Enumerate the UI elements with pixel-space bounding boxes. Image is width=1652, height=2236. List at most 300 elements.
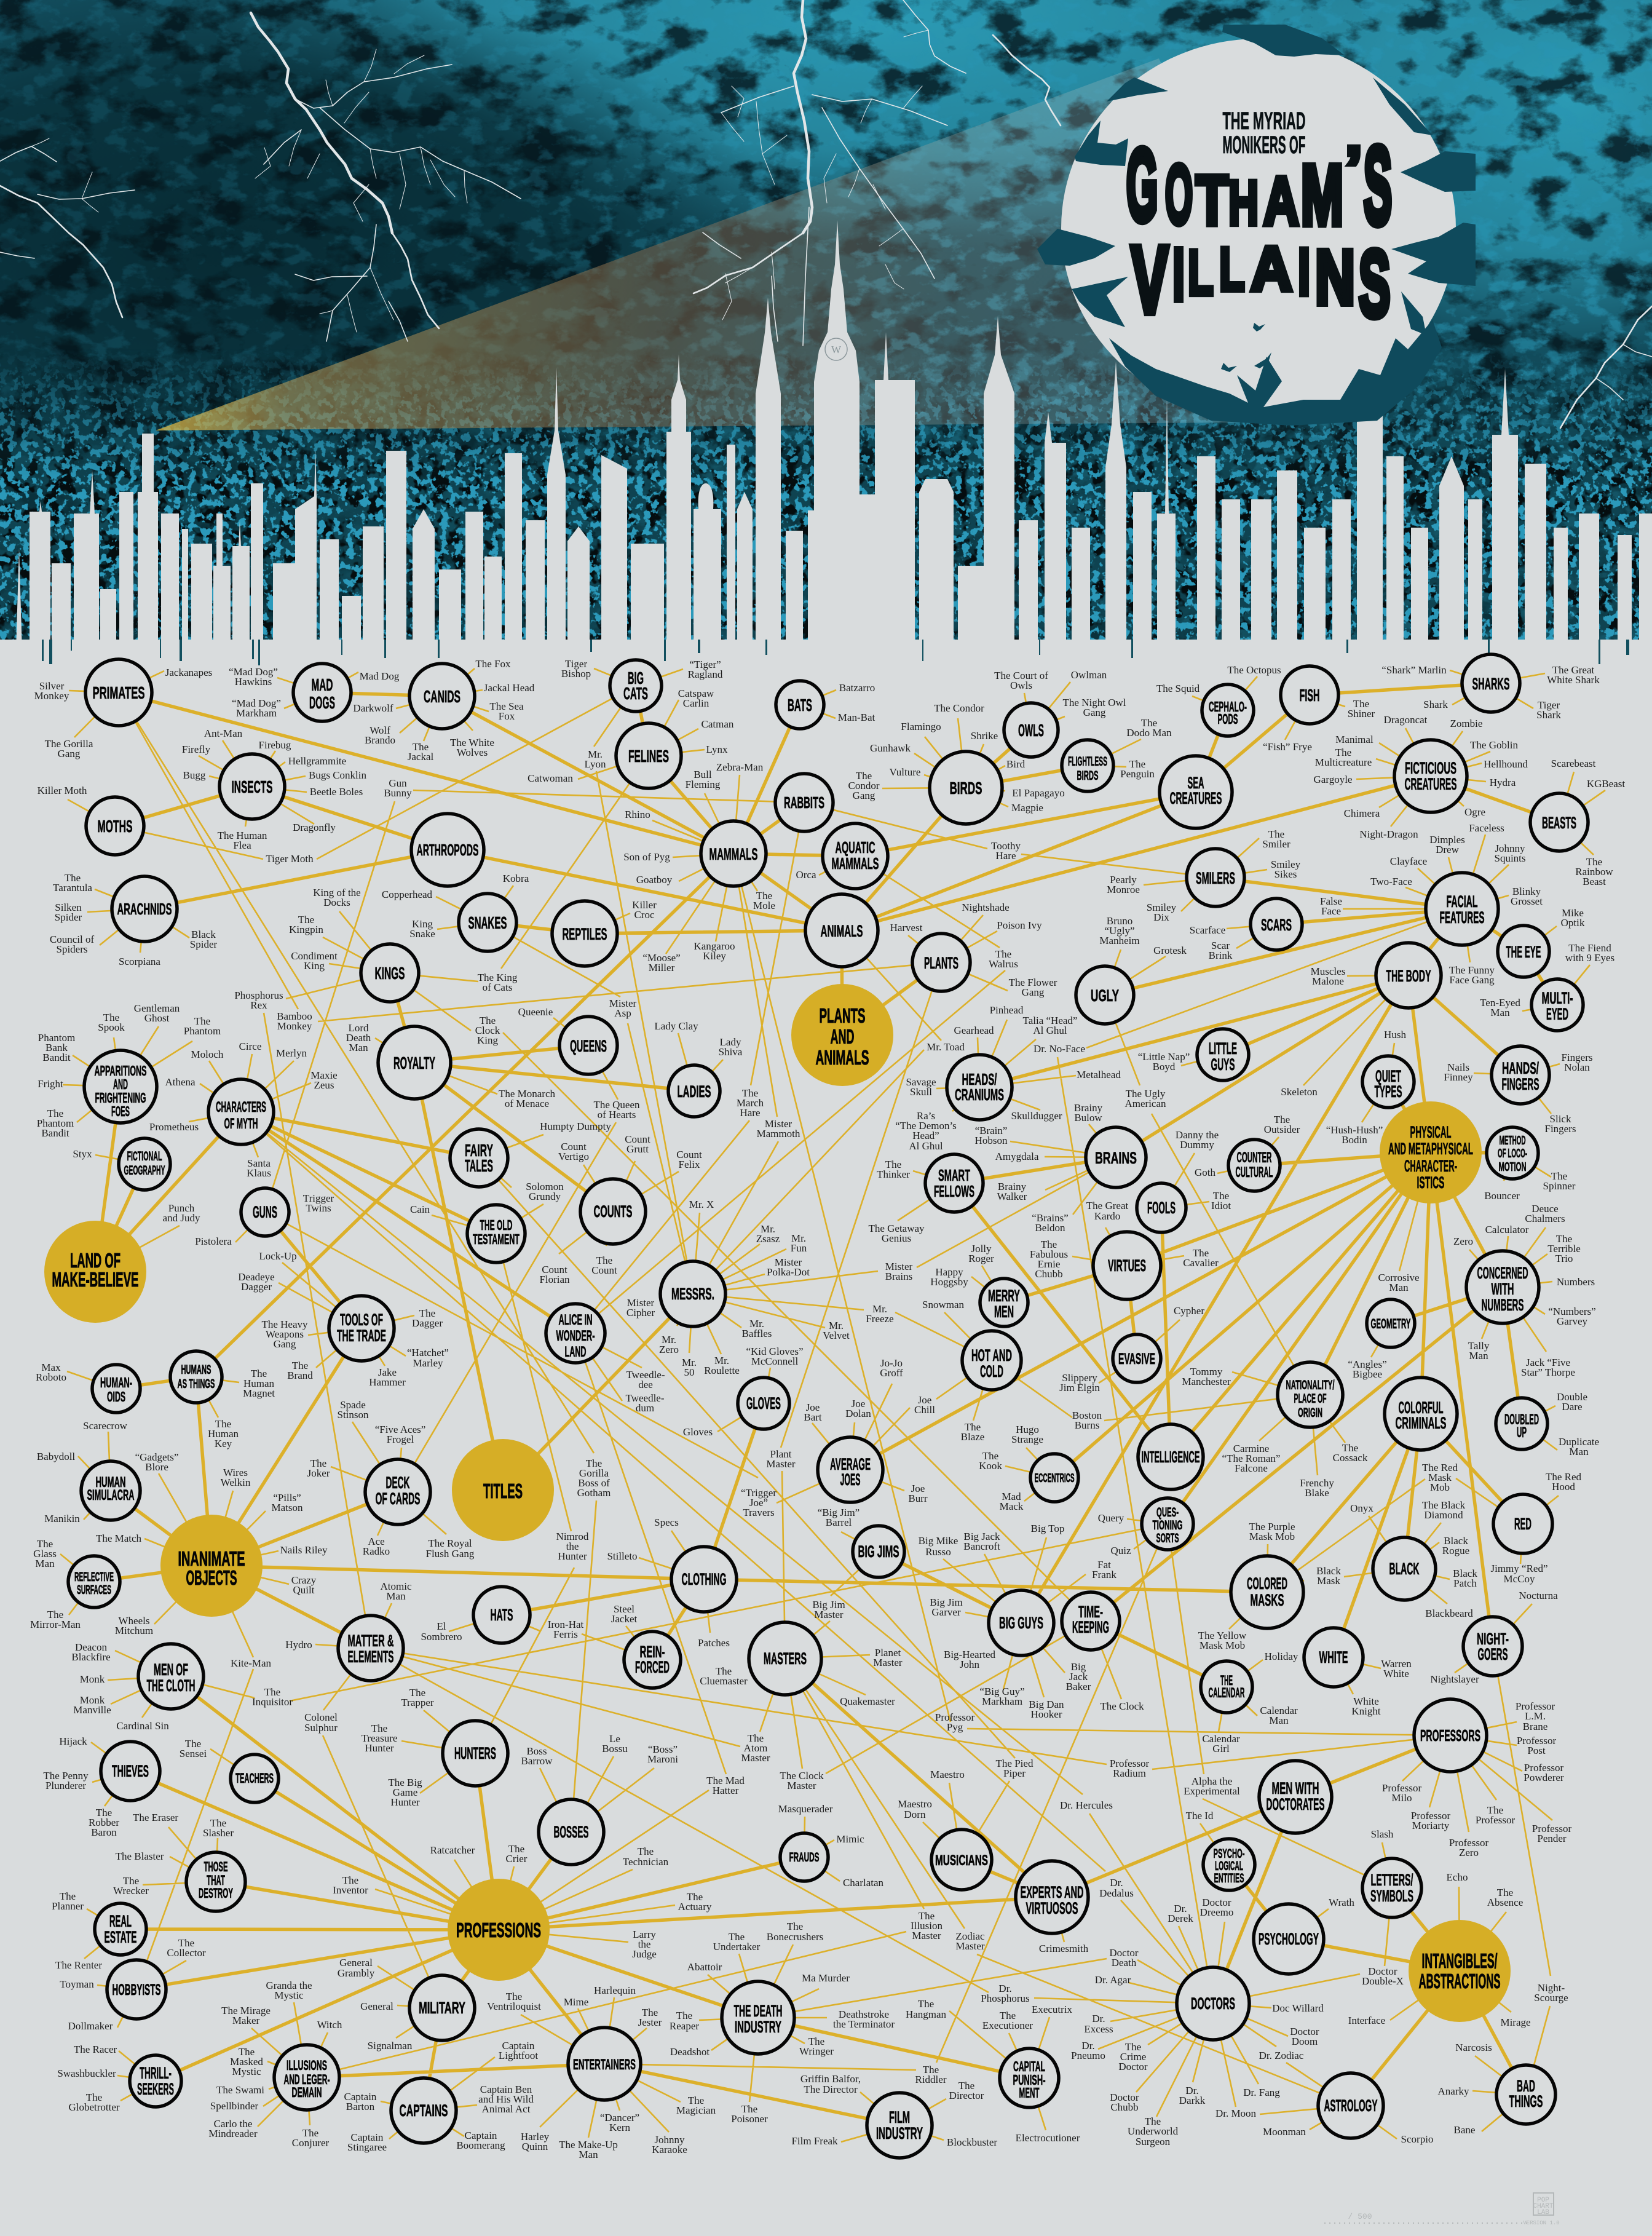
- node: Captains: Captain Ben: [480, 2083, 532, 2095]
- node: Professors: Professor: [1532, 1823, 1571, 1834]
- node: Messrs.: Zero: [659, 1344, 679, 1355]
- hub: Professions: Inventor: [333, 1884, 368, 1896]
- node: Mammals: Rhino: [625, 809, 650, 820]
- node: Professors: PROFESSORS: [1420, 1726, 1480, 1745]
- node: Professors: Radium: [1113, 1767, 1146, 1779]
- node: Humans as Things: Key: [215, 1438, 232, 1449]
- node: Primates: Silver: [39, 680, 64, 692]
- node: Nationality / Place of Origin: “The Roman”: [1222, 1453, 1280, 1464]
- node: Doctors: [981, 1799, 1404, 2147]
- node: Kings: Monkey: [277, 1020, 312, 1032]
- node: Doctors: Chubb: [1110, 2101, 1139, 2113]
- hub: Professions: Judge: [632, 1948, 657, 1960]
- node: Real Estate: Planner: [52, 1900, 84, 1912]
- node: Average Joes: Travers: [743, 1507, 775, 1518]
- poster title: V: [1131, 227, 1168, 333]
- node: Messrs.: Mr.: [714, 1355, 729, 1366]
- node: Insects: Bugs Conklin: [309, 769, 366, 781]
- node: Thrill-Seekers: The Racer: [74, 2044, 117, 2055]
- node: The Eye: Mike: [1562, 907, 1584, 919]
- node: Kings: KINGS: [375, 964, 405, 983]
- node: Heads / Craniums: HEADS/: [962, 1070, 997, 1088]
- node: Tools of the Trade: Lock-Up: [259, 1250, 297, 1262]
- node: Doctors: Doctor: [1368, 1965, 1397, 1977]
- node: Hats: Ferris: [553, 1628, 578, 1640]
- node: Hobbyists: [60, 1937, 206, 2032]
- node: Hot and Cold: HOT AND: [971, 1346, 1012, 1365]
- node: Felines: Lynx: [706, 743, 728, 755]
- node: Bosses: BOSSES: [553, 1823, 589, 1841]
- hub: Inanimate Objects: Nails Riley: [280, 1544, 328, 1556]
- node: Rabbits: Toothy: [991, 840, 1021, 852]
- node: Canids: Wolf: [370, 724, 390, 736]
- hub: Inanimate Objects: OBJECTS: [186, 1566, 237, 1589]
- node: Masters: Master: [873, 1657, 903, 1668]
- node: Geometry: “Angles”: [1348, 1358, 1387, 1370]
- node: Ficticious Creatures: The: [1335, 747, 1351, 758]
- node: Messrs.: Mr.: [662, 1334, 676, 1346]
- node: Men of the Cloth: Inquisitor: [252, 1696, 293, 1708]
- node: Messrs.: Baffles: [742, 1328, 772, 1339]
- node: Fish: [1263, 666, 1375, 753]
- node: Doctors: Dr.: [1174, 1903, 1187, 1914]
- node: The Death Industry: The: [787, 1921, 803, 1932]
- node: Characters of Myth: Merlyn: [276, 1047, 307, 1059]
- node: Entertainers: Harlequin: [594, 1984, 636, 1996]
- city skyline: W: [831, 344, 842, 355]
- node: Fictional Geography: Styx: [73, 1148, 92, 1160]
- node: Masters: Quakemaster: [840, 1695, 895, 1707]
- node: Illusions and Legerdemain: Witch: [317, 2019, 342, 2031]
- node: Film Industry: The: [958, 2080, 974, 2091]
- node: Birds: Shrike: [971, 730, 998, 742]
- hub: Physical and Metaphysical Characteristics: ISTICS: [1417, 1173, 1445, 1192]
- node: The Calendar: Man: [1269, 1715, 1289, 1726]
- node: Geometry: GEOMETRY: [1371, 1316, 1411, 1331]
- node: Big Guys: Big-Hearted: [944, 1649, 995, 1660]
- node: Mammals: Bull: [694, 769, 712, 780]
- spotlight beam: [156, 58, 1322, 430]
- node: Method of Locomotion: MOTION: [1499, 1160, 1526, 1174]
- node: Reptiles: Killer: [632, 899, 657, 911]
- node: Characters of Myth: Athena: [165, 1076, 196, 1088]
- node: Illusions and Legerdemain: Spellbinder: [210, 2100, 259, 2112]
- node: Those That Destroy: Wrecker: [113, 1885, 149, 1897]
- node: Virtues: Fabulous: [1030, 1248, 1068, 1260]
- node: Fools: The: [1213, 1190, 1229, 1202]
- node: Concerned with Numbers: Zero: [1453, 1235, 1473, 1247]
- node: Reinforced: [611, 1603, 681, 1688]
- node: Facial Features: Face Gang: [1449, 974, 1495, 986]
- node: Bats: Man-Bat: [838, 712, 875, 723]
- node: Entertainers: Man: [579, 2149, 598, 2160]
- node: The Death Industry: The: [729, 1931, 745, 1943]
- node: Beasts: Rainbow: [1575, 866, 1613, 878]
- node: Kings: Phosphorus: [234, 989, 283, 1001]
- node: Brains: [885, 1102, 1146, 1282]
- node: Heads / Craniums: Head”: [912, 1130, 939, 1141]
- node: Black: Onyx: [1350, 1502, 1373, 1514]
- node: Royalty: Queenie: [518, 1006, 553, 1018]
- node: Rabbits: Hare: [995, 850, 1016, 862]
- node: Big Cats: [561, 658, 723, 770]
- node: Concerned with Numbers: Numbers: [1557, 1276, 1595, 1288]
- node: Doctors: Dr.: [1092, 2013, 1105, 2024]
- node: Reptiles: Croc: [634, 909, 655, 921]
- node: Snakes: Mister: [609, 997, 636, 1009]
- node: Men of the Cloth: The: [264, 1686, 280, 1698]
- node: Mad Dogs: Markham: [236, 707, 277, 719]
- node: Big Guys: Fat: [1097, 1559, 1111, 1571]
- node: Ficticious Creatures: [1314, 714, 1528, 840]
- node: Black: The Black: [1422, 1499, 1465, 1511]
- node: Kings: Kingpin: [289, 924, 323, 935]
- node: Captains: Captain: [344, 2091, 376, 2103]
- node: Ficticious Creatures: Hellhound: [1484, 758, 1528, 770]
- node: Ficticious Creatures: The Goblin: [1470, 739, 1518, 751]
- node: Questioning Sorts: SORTS: [1156, 1531, 1179, 1545]
- node: Thrill-Seekers: The: [86, 2091, 102, 2103]
- node: Messrs.: Freeze: [866, 1313, 894, 1325]
- hub: Physical and Metaphysical Characteristics: CHARACTER-: [1404, 1157, 1457, 1175]
- hub: Professions: PROFESSIONS: [456, 1919, 541, 1941]
- node: Smilers: Dix: [1153, 911, 1169, 923]
- node: Brains: Amygdala: [995, 1151, 1039, 1162]
- node: Captains: Barton: [346, 2101, 375, 2112]
- node: Fools: Dummy: [1180, 1139, 1214, 1151]
- hub: Plants and Animals: PLANTS: [819, 1004, 866, 1027]
- node: Deck of Cards: Flush Gang: [426, 1548, 475, 1560]
- node: Snakes: [382, 873, 637, 1019]
- node: Experts and Virtuosos: [1016, 1861, 1089, 1954]
- node: Capital Punishment: Executrix: [1032, 2004, 1073, 2015]
- node: Mammals: MAMMALS: [709, 845, 757, 863]
- node: Doctors: Doctor: [1202, 1897, 1231, 1908]
- node: Captains: Stingaree: [347, 2141, 387, 2153]
- node: Doctors: Dr. Hercules: [1060, 1799, 1113, 1811]
- hub: Intangibles / Abstractions: Echo: [1447, 1871, 1468, 1883]
- node: Concerned with Numbers: Calculator: [1485, 1224, 1529, 1235]
- node: Felines: Catman: [702, 718, 734, 730]
- node: Capital Punishment: Hangman: [906, 2008, 947, 2020]
- node: Mammals: Mole: [753, 900, 775, 911]
- node: Reinforced: Jacket: [611, 1613, 638, 1625]
- node: Masters: Planet: [875, 1647, 901, 1659]
- node: Guns: GUNS: [253, 1203, 277, 1221]
- node: Professors: Brane: [1523, 1721, 1547, 1732]
- node: Masters: The: [716, 1665, 732, 1677]
- node: Men of the Cloth: Deacon: [75, 1641, 107, 1653]
- node: Quiet Types: “Hush-Hush”: [1326, 1124, 1383, 1136]
- node: Multi-Eyed: EYED: [1546, 1005, 1568, 1023]
- node: Merry Men: Roger: [968, 1253, 994, 1264]
- node: Masters: Master: [741, 1752, 770, 1764]
- node: Doctors: Crime: [1120, 2051, 1146, 2063]
- node: Characters of Myth: Zeus: [314, 1079, 334, 1091]
- node: Owls: Owlman: [1071, 669, 1107, 681]
- poster title: T: [1196, 162, 1228, 240]
- node: Characters of Myth: CHARACTERS: [216, 1099, 266, 1116]
- node: Smilers: Pearly: [1110, 874, 1137, 886]
- node: Deck of Cards: “Five Aces”: [375, 1424, 425, 1435]
- node: Average Joes: Dolan: [845, 1408, 871, 1419]
- node: Black: Diamond: [1424, 1509, 1463, 1521]
- node: Men of the Cloth: Monk: [80, 1694, 105, 1706]
- node: Professors: Professor: [1110, 1758, 1149, 1769]
- node: Counts: Count: [625, 1133, 650, 1145]
- node: Primates: Gorilla: [579, 1467, 609, 1479]
- node: Experts and Virtuosos: Crimesmith: [1039, 1943, 1089, 1954]
- node: Illusions and Legerdemain: [208, 1980, 342, 2149]
- node: Deck of Cards: The Royal: [428, 1537, 472, 1549]
- node: Flightless Birds: The: [1141, 717, 1157, 729]
- node: Snakes: King: [412, 918, 433, 930]
- node: Film Industry: Film Freak: [791, 2135, 838, 2147]
- node: Beasts: KGBeast: [1587, 778, 1625, 790]
- node: Scars: SCARS: [1261, 916, 1292, 934]
- node: Big Jims: Master: [814, 1609, 844, 1620]
- node: Hobbyists: Collector: [167, 1947, 206, 1959]
- node: Bosses: Maroni: [647, 1753, 678, 1765]
- poster title: MONIKERS OF: [1222, 132, 1306, 159]
- node: Brains: Hobson: [975, 1135, 1008, 1146]
- node: Humans as Things: Human: [208, 1428, 239, 1440]
- node: Nationality / Place of Origin: PLACE OF: [1294, 1392, 1327, 1406]
- node: Messrs.: Mr.: [749, 1318, 764, 1330]
- node: Smart Fellows: The: [885, 1159, 901, 1170]
- node: Frauds: FRAUDS: [789, 1850, 819, 1865]
- node: Brains: Brains: [885, 1271, 912, 1282]
- node: Average Joes: Joe”: [749, 1497, 768, 1509]
- node: Men with Doctorates: [1259, 1761, 1332, 1833]
- node: Hobbyists: Toyman: [60, 1978, 94, 1990]
- node: Owls: Owls: [1010, 680, 1032, 691]
- node: Plants: [890, 902, 1057, 998]
- node: Royalty: Death: [346, 1032, 371, 1044]
- node: Hunters: The: [409, 1687, 425, 1699]
- node: Big Guys: [919, 1523, 1116, 1720]
- node: Concerned with Numbers: Garvey: [1557, 1315, 1588, 1327]
- node: Human Simulacra: SIMULACRA: [87, 1487, 134, 1504]
- node: Thrill-Seekers: Swashbuckler: [57, 2068, 116, 2079]
- node: Arachnids: Tarantula: [53, 882, 92, 894]
- node: Big Guys: Big Top: [1031, 1523, 1064, 1534]
- hub: Inanimate Objects: Wires: [223, 1467, 248, 1478]
- node: Concerned with Numbers: Star” Thorpe: [1521, 1366, 1575, 1378]
- node: The Death Industry: Deadshot: [670, 2046, 709, 2058]
- node: Brains: Beldon: [1035, 1222, 1065, 1234]
- node: Masters: Master: [766, 1458, 796, 1470]
- node: Film Industry: The Director: [804, 2083, 858, 2095]
- node: Flightless Birds: Dodo Man: [1126, 727, 1172, 739]
- node: Big Jims: Big Jim: [812, 1599, 845, 1611]
- node: Human Simulacra: Scarecrow: [83, 1420, 128, 1432]
- node: The Death Industry: The: [808, 2036, 824, 2047]
- node: Reflective Surfaces: Glass: [33, 1548, 57, 1560]
- node: Ladies: Lady Clay: [654, 1020, 698, 1032]
- node: Deck of Cards: Joker: [307, 1467, 330, 1479]
- node: Moths: Tiger Moth: [266, 853, 314, 865]
- node: Questioning Sorts: [915, 1498, 1240, 2085]
- node: Primates: Boss of: [578, 1477, 610, 1489]
- node: Primates: Gotham: [577, 1487, 611, 1499]
- node: Facial Features: False: [1320, 895, 1342, 907]
- node: Heads / Craniums: Metalhead: [1077, 1069, 1121, 1080]
- node: Tools of the Trade: [238, 1250, 449, 1388]
- node: Snakes: Kobra: [503, 873, 529, 884]
- node: Average Joes: Joe: [852, 1398, 865, 1409]
- node: Hands / Fingers: FINGERS: [1501, 1075, 1539, 1093]
- node: Apparitions and Frightening Foes: Phantom: [37, 1117, 74, 1129]
- node: Questioning Sorts: Riddler: [915, 2074, 947, 2085]
- node: Moths: [38, 785, 314, 865]
- node: Aquatic Mammals: MAMMALS: [831, 854, 879, 873]
- node: Red: Mask: [1428, 1472, 1452, 1483]
- node: Nationality / Place of Origin: [1182, 1362, 1368, 1499]
- node: Geometry: [1348, 1299, 1415, 1380]
- hub: Land of Make-Believe: [44, 1202, 200, 1323]
- node: Doctors: Dr. Fang: [1243, 2087, 1280, 2098]
- node: Ficticious Creatures: Chimera: [1344, 807, 1380, 819]
- node: The Death Industry: the Terminator: [833, 2018, 895, 2030]
- node: Smilers: Smiley: [1271, 858, 1300, 870]
- footer: edition line and Pop Chart Lab logo: / 500: [1348, 2212, 1372, 2221]
- node: The Death Industry: Wringer: [799, 2045, 834, 2057]
- node: Nationality / Place of Origin: The: [1342, 1442, 1358, 1454]
- node: White: Warren: [1381, 1658, 1412, 1670]
- hub: Inanimate Objects: “Gadgets”: [135, 1451, 178, 1463]
- hub: Land of Make-Believe: MAKE-BELIEVE: [52, 1268, 139, 1291]
- node: Red: The Red: [1422, 1462, 1458, 1473]
- node: Deck of Cards: OF CARDS: [375, 1489, 421, 1508]
- hub: Plants and Animals: AND: [830, 1025, 855, 1048]
- node: Capital Punishment: PUNISH-: [1013, 2072, 1045, 2088]
- node: Masters: Plant: [770, 1448, 791, 1460]
- node: Captains: [344, 2040, 538, 2153]
- node: Mammals: Miller: [649, 962, 675, 973]
- node: Moths: Killer Moth: [38, 785, 87, 796]
- node: Illusions and Legerdemain: Mystic: [274, 1989, 304, 2001]
- node: White: Knight: [1351, 1705, 1381, 1717]
- node: Big Jims: [812, 1507, 904, 1620]
- node: Virtues: The: [1041, 1239, 1057, 1250]
- node: Concerned with Numbers: Trio: [1555, 1253, 1573, 1264]
- node: Illusions and Legerdemain: The Mirage: [221, 2005, 271, 2016]
- node: Smart Fellows: Genius: [882, 1232, 911, 1244]
- node: Doctors: Dr.: [1081, 2040, 1095, 2052]
- node: Mammals: Goatboy: [636, 874, 673, 886]
- node: Gloves: GLOVES: [746, 1394, 781, 1413]
- node: Ugly: [1076, 915, 1187, 1109]
- node: Birds: Gang: [853, 790, 875, 801]
- node: Illusions and Legerdemain: Masked: [230, 2056, 263, 2068]
- node: Little Guys: Boyd: [1153, 1061, 1176, 1072]
- hub: Inanimate Objects: The Match: [96, 1532, 142, 1544]
- node: Arachnids: Black: [191, 929, 216, 940]
- node: Ladies: [654, 1020, 743, 1117]
- node: Messrs.: [626, 1199, 894, 1378]
- node: Ugly: Manheim: [1099, 935, 1140, 946]
- node: Thrill-Seekers: [57, 2044, 181, 2113]
- node: The Old Testament: TESTAMENT: [473, 1231, 520, 1247]
- node: Quiet Types: Bodin: [1342, 1134, 1367, 1146]
- node: Doctors: The: [1145, 2115, 1161, 2127]
- node: Cephalopods: PODS: [1217, 711, 1238, 727]
- node: The Death Industry: INDUSTRY: [735, 2018, 781, 2036]
- node: Humans as Things: The: [215, 1418, 231, 1430]
- node: The Body: Muscles: [1311, 965, 1345, 977]
- node: Royalty: [346, 1006, 556, 1109]
- node: Characters of Myth: Moloch: [191, 1049, 224, 1060]
- node: Matter and Elements: Colonel: [304, 1711, 338, 1723]
- node: Musicians: [898, 1758, 1033, 1890]
- node: Professors: Post: [1527, 1745, 1546, 1756]
- node: Doubled Up: UP: [1517, 1424, 1527, 1441]
- node: Quiet Types: [1326, 1029, 1414, 1146]
- hub: Professions: The: [342, 1874, 358, 1886]
- node: Matter and Elements: MATTER &: [348, 1631, 393, 1650]
- node: Hot and Cold: Burns: [1075, 1419, 1099, 1431]
- node: Characters of Myth: OF MYTH: [224, 1116, 258, 1132]
- node: Human Simulacra: Babydoll: [37, 1451, 75, 1462]
- thin villain connectors: [60, 668, 1605, 2142]
- node: Tools of the Trade: “Hatchet”: [407, 1347, 449, 1358]
- node: Illusions and Legerdemain: ILLUSIONS: [287, 2058, 327, 2073]
- node: Mammals: Mister: [765, 1118, 792, 1130]
- node: Mammals: Fleming: [686, 779, 721, 790]
- node: Timekeeping: TIME-: [1078, 1603, 1103, 1621]
- node: Fairy Tales: Solomon: [526, 1181, 564, 1192]
- node: Flightless Birds: Penguin: [1120, 768, 1155, 780]
- node: Fish: The: [1353, 698, 1369, 710]
- node: Messrs.: Mister: [775, 1256, 802, 1268]
- node: Questioning Sorts: Quiz: [1110, 1545, 1131, 1556]
- node: Geometry: Bigbee: [1353, 1368, 1382, 1380]
- node: Thieves: The Penny: [43, 1770, 89, 1782]
- node: Virtues: The Great: [1086, 1200, 1128, 1211]
- node: Hunters: Game: [393, 1786, 417, 1798]
- node: Entertainers: The: [642, 2007, 658, 2018]
- node: Illusions and Legerdemain: Mystic: [232, 2066, 261, 2077]
- node: Kings: The: [480, 1015, 496, 1026]
- node: Beasts: Beast: [1583, 876, 1606, 887]
- node: Matter and Elements: Man: [386, 1590, 406, 1602]
- node: Counts: The: [596, 1255, 612, 1266]
- node: Musicians: Dorn: [904, 1809, 926, 1820]
- node: Ladies: Lady: [720, 1036, 741, 1048]
- node: Sharks: Tiger: [1538, 699, 1560, 711]
- node: Humanoids: Max: [41, 1362, 61, 1373]
- node: Tools of the Trade: Jake: [378, 1366, 397, 1378]
- node: Hunters: The: [371, 1723, 387, 1734]
- poster title: N: [1315, 235, 1355, 321]
- node: Fairy Tales: FAIRY: [465, 1141, 493, 1160]
- node: Messrs.: Cipher: [626, 1307, 655, 1318]
- node: Eccentrics: Mack: [1000, 1501, 1024, 1512]
- node: Bosses: [521, 1733, 678, 1865]
- node: Bad Things: Narcosis: [1455, 2042, 1492, 2053]
- hub: Professions: The: [638, 1845, 654, 1857]
- node: Ficticious Creatures: FICTICIOUS: [1405, 759, 1456, 777]
- node: Merry Men: MERRY: [988, 1286, 1020, 1305]
- node: Bad Things: BAD: [1517, 2077, 1535, 2095]
- node: Nationality / Place of Origin: ORIGIN: [1298, 1406, 1322, 1420]
- node: Deck of Cards: Spade: [340, 1399, 366, 1411]
- node: Bad Things: THINGS: [1509, 2092, 1543, 2111]
- node: Night-Goers: Scourge: [1534, 1992, 1568, 2004]
- node: Doctors: Dr.: [1110, 1877, 1123, 1889]
- node: Insects: Ant-Man: [204, 727, 243, 739]
